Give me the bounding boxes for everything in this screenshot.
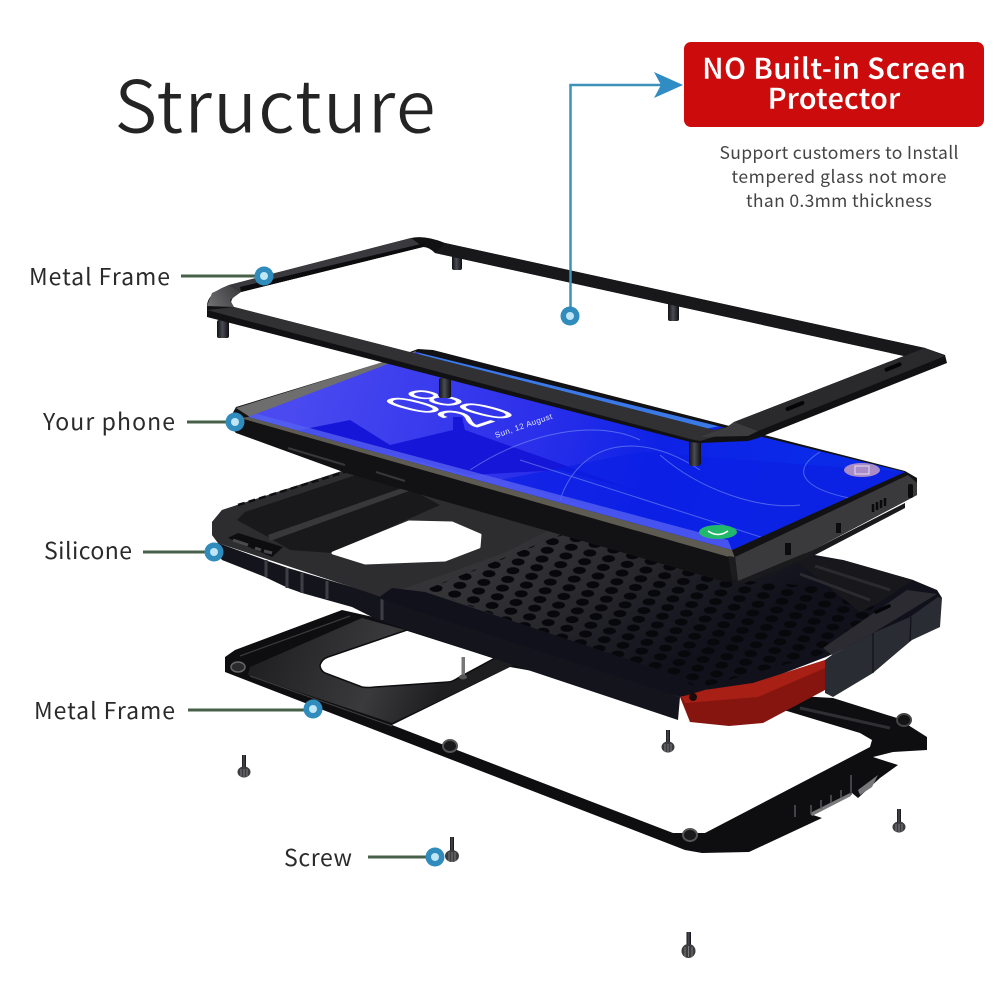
screw 4 <box>445 837 459 862</box>
callout description: tempered glass not more <box>732 164 946 189</box>
tray rail <box>268 487 412 541</box>
label: metal frame bottom <box>34 692 322 726</box>
frame body <box>225 610 927 853</box>
corner facet <box>700 422 758 437</box>
left corner highlight <box>207 285 241 307</box>
label: silicone <box>44 532 224 566</box>
slot 1 <box>785 400 805 412</box>
speaker slots <box>873 498 885 512</box>
end block seams <box>873 617 911 673</box>
right end block <box>825 597 942 697</box>
screw 5 <box>682 932 696 958</box>
screw in plate hole <box>459 657 467 680</box>
clip grey inlay 1 <box>810 793 851 816</box>
label: metal frame top: Metal Frame <box>29 258 170 292</box>
honeycomb holes <box>425 533 885 688</box>
frame boss lower <box>683 829 697 841</box>
label: metal frame bottom: Metal Frame <box>34 692 175 726</box>
right tray interior <box>790 556 913 612</box>
screen <box>248 352 905 550</box>
callout: no built-in screen protector <box>684 42 984 213</box>
red corner bumper <box>680 660 825 726</box>
honeycomb panel <box>392 530 880 693</box>
arrow: screen to callout <box>560 72 683 326</box>
rail highlight <box>240 616 392 726</box>
clock hour: 08 <box>365 384 482 419</box>
bottom metal frame <box>225 610 927 853</box>
title: Structure <box>114 49 436 155</box>
phone front edge strip <box>240 417 735 558</box>
left bar highlight <box>229 238 423 292</box>
end shading <box>738 503 905 583</box>
back bar face <box>435 243 925 356</box>
side wall grey tabs <box>266 560 382 620</box>
vent slits <box>233 540 272 553</box>
corner cap <box>728 556 738 581</box>
frame pin 5 <box>689 440 701 466</box>
silicone side wall <box>212 543 680 720</box>
label: screw <box>284 839 444 873</box>
usb port <box>836 523 841 533</box>
camera cut-out <box>333 522 480 563</box>
callout description: than 0.3mm thickness <box>746 188 932 213</box>
screw 1 <box>238 755 250 778</box>
phone rim <box>236 351 416 417</box>
phone body <box>229 349 917 582</box>
ridge slots <box>876 606 889 612</box>
frame boss right <box>897 714 911 726</box>
frame plate <box>248 618 520 723</box>
frame pin 2 <box>668 303 679 321</box>
phone bottom end <box>735 475 917 581</box>
label: your phone <box>42 403 244 437</box>
plate window <box>320 630 495 688</box>
silicone grey plate <box>212 470 560 598</box>
top bar highlight <box>800 708 890 728</box>
label: screw: Screw <box>284 839 352 873</box>
top edge ribs <box>238 472 345 505</box>
clip pegs <box>795 775 851 817</box>
phone <box>229 349 917 583</box>
callout description: Support customers to Install <box>720 140 959 165</box>
frame pin 1 <box>452 254 462 270</box>
icon: call button <box>699 525 737 539</box>
label: metal frame top <box>29 258 274 292</box>
silicone top surface <box>212 470 942 697</box>
frame body <box>207 237 947 443</box>
frame pin 3 <box>217 320 229 338</box>
callout box <box>684 42 984 127</box>
frame pin 4 <box>439 378 451 398</box>
screw 3 <box>892 809 906 833</box>
screw 2 <box>662 730 674 753</box>
bumper highlight <box>682 660 825 703</box>
tray grooves <box>800 566 890 600</box>
frame boss left <box>231 662 245 672</box>
clip grey inlay 2 <box>858 775 878 795</box>
silicone layer <box>212 470 942 726</box>
stylus slot <box>908 484 913 498</box>
right ridge band <box>823 590 937 655</box>
left bar inner edge <box>240 243 425 292</box>
front bar face <box>207 307 734 441</box>
right bar face <box>734 348 945 431</box>
label: silicone: Silicone <box>44 532 132 566</box>
callout heading: Protector <box>768 76 901 118</box>
slot 2 <box>884 362 902 372</box>
front lip <box>378 588 690 697</box>
vent cluster <box>228 533 283 557</box>
frame boss middle <box>443 740 457 752</box>
side buttons <box>288 448 405 481</box>
clock minutes: 20 <box>416 397 533 432</box>
date: Sun, 12 August <box>494 412 554 440</box>
top metal frame <box>207 237 947 466</box>
wallpaper details <box>248 352 905 550</box>
bumper screw <box>689 693 697 701</box>
icon: camera app <box>844 463 880 477</box>
label: your phone: Your phone <box>42 403 175 437</box>
headphone port <box>785 543 791 555</box>
callout heading: NO Built-in Screen <box>702 46 966 88</box>
inner tray <box>237 473 440 553</box>
